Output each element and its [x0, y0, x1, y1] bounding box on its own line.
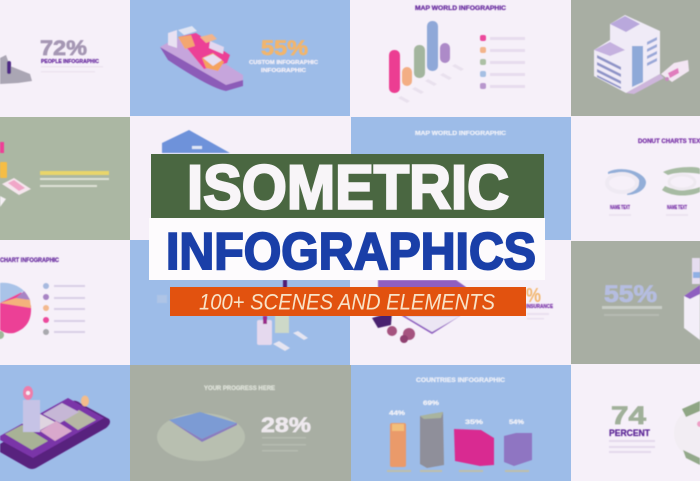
labels: donut: NAME TEXT	[610, 205, 630, 211]
bar: purple: 54%	[509, 420, 525, 426]
number 74: 74	[611, 402, 646, 430]
bar labels	[387, 470, 529, 472]
panel: isometric diagram lower middle	[372, 280, 554, 343]
bar: gray	[420, 401, 444, 468]
heading: chart infographic: CHART INFOGRAPHIC	[0, 258, 60, 264]
legend	[480, 35, 525, 89]
icon: isometric boxes	[257, 280, 308, 351]
text lines	[157, 295, 167, 303]
icon: isometric blocks	[0, 142, 31, 207]
panel: countries bar chart	[387, 378, 532, 472]
percent 55%: 55%	[261, 37, 308, 60]
percent 28%: 28%	[261, 414, 311, 437]
panel: pie chart infographic	[0, 258, 85, 339]
banner: infographics: INFOGRAPHICS	[166, 223, 536, 281]
banner: subtitle: 100+ SCENES AND ELEMENTS	[199, 290, 495, 314]
percent: %	[526, 285, 541, 307]
panel: your progress pie	[157, 386, 311, 461]
icon: map card behind title	[162, 130, 230, 153]
bar: gray: 69%	[423, 401, 440, 407]
icon: isometric house	[372, 280, 466, 343]
panel: donut charts: NAME TEXT	[667, 205, 687, 211]
panel: ship percent	[160, 26, 318, 91]
text lines	[40, 171, 109, 187]
chart: isometric disc	[157, 412, 245, 461]
icon: people cluster	[0, 55, 32, 84]
heading: map world infographic: MAP WORLD INFOGRAPHIC	[415, 6, 507, 12]
panel: ship percent: INFOGRAPHIC	[261, 68, 307, 74]
panel: sage text block left	[0, 142, 109, 207]
icon: building edge	[684, 258, 700, 340]
chart: blue donut	[607, 169, 646, 195]
icon: ambulance	[661, 60, 689, 82]
caption: ship: CUSTOM INFOGRAPHIC	[249, 60, 318, 66]
panel: donut charts	[607, 139, 700, 216]
chart: isometric bars	[389, 21, 464, 103]
heading: countries infographic: COUNTRIES INFOGRAPHIC	[416, 378, 506, 384]
chart: green donut	[662, 167, 700, 196]
icon: cargo ship	[160, 26, 243, 91]
bar: pink	[454, 420, 494, 466]
heading: your progress: YOUR PROGRESS HERE	[204, 386, 275, 392]
panel: map world bars	[389, 6, 525, 103]
percent 72%: 72%	[40, 37, 87, 60]
chart: isometric pie	[0, 283, 31, 339]
caption	[602, 306, 662, 309]
title banner	[149, 154, 545, 316]
banner: isometric: ISOMETRIC	[187, 154, 509, 222]
heading: percent: PERCENT	[609, 428, 650, 438]
bar: pink: 35%	[465, 420, 484, 426]
icon: isometric phone	[0, 398, 110, 469]
caption: INSURANCE	[526, 304, 554, 310]
panel: 74 percent	[609, 401, 700, 465]
icon: isometric hospital	[594, 15, 664, 94]
panel: map world heading on blue: MAP WORLD INFOGRAPHIC	[415, 131, 507, 137]
panel: hospital building	[594, 15, 689, 94]
panel: blue tile behind orange band	[157, 280, 308, 351]
percent 55%: 55%	[604, 281, 657, 308]
chart: segmented ring	[674, 401, 700, 465]
panel: phone city	[0, 386, 110, 469]
panel: people infographic	[0, 37, 103, 84]
bar: orange: 44%	[389, 411, 406, 417]
icon: tower and pins	[23, 386, 89, 432]
heading: people infographic: PEOPLE INFOGRAPHIC	[41, 59, 99, 65]
bar: purple	[504, 420, 532, 466]
legend	[43, 283, 85, 335]
bar: orange	[389, 411, 406, 467]
panel: sage 55% with building	[602, 258, 700, 340]
